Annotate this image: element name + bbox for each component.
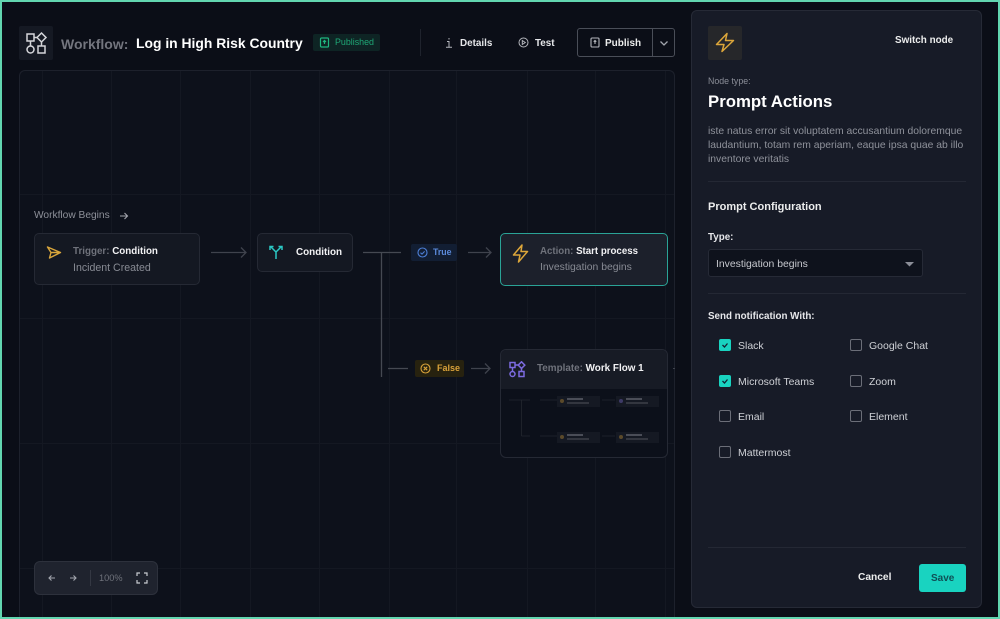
option: google chat: Google Chat bbox=[869, 340, 928, 352]
option: google chat bbox=[850, 339, 928, 352]
panel: zoom controls bbox=[34, 561, 158, 595]
divider bbox=[420, 29, 421, 56]
option: element bbox=[850, 410, 908, 423]
button: save: Save bbox=[931, 573, 954, 584]
badge: false bbox=[415, 360, 464, 377]
condition text: Condition bbox=[296, 247, 342, 258]
option: zoom bbox=[850, 375, 896, 388]
button: test: Test bbox=[535, 38, 555, 48]
label: send notification: Send notification With: bbox=[708, 311, 815, 322]
action text: Action: Start process bbox=[540, 246, 638, 256]
label: workflow begins: Workflow Begins bbox=[34, 210, 110, 221]
badge: true: True bbox=[433, 247, 452, 257]
label: type: Type: bbox=[708, 232, 733, 243]
badge: published: Published bbox=[335, 37, 374, 47]
template preview bbox=[509, 396, 659, 443]
connector stub bbox=[673, 368, 675, 369]
panel: workflow canvas bbox=[19, 70, 675, 617]
node: action bbox=[500, 233, 668, 286]
option: mattermost: Mattermost bbox=[738, 447, 791, 459]
icon: send bbox=[46, 246, 62, 259]
zoom level: 100% bbox=[99, 572, 122, 582]
heading: prompt configuration: Prompt Configuration bbox=[708, 200, 822, 212]
button: publish: Publish bbox=[605, 38, 641, 48]
icon: forward bbox=[70, 575, 77, 581]
panel: node settings bbox=[691, 10, 982, 608]
title: Log in High Risk Country bbox=[136, 34, 303, 50]
button: save bbox=[919, 564, 966, 592]
select: type: Investigation begins bbox=[716, 258, 808, 270]
select: type bbox=[708, 249, 923, 277]
icon: node lightning bbox=[708, 26, 742, 60]
icon: split bbox=[269, 246, 283, 259]
description: laudantium, totam rem aperiam, eaque ipsa quae ab illo bbox=[708, 140, 963, 150]
action sub text: Investigation begins bbox=[540, 262, 632, 272]
icon: back bbox=[48, 575, 55, 581]
icon: template bbox=[509, 361, 526, 378]
button: details bbox=[446, 38, 492, 48]
node: condition bbox=[257, 233, 353, 272]
arrow: false to template bbox=[471, 363, 491, 374]
button: cancel: Cancel bbox=[858, 572, 891, 583]
option: email: Email bbox=[738, 411, 764, 423]
template text: Template: Work Flow 1 bbox=[537, 363, 644, 374]
option: email bbox=[719, 410, 764, 423]
title bbox=[61, 34, 303, 52]
connector: branch bbox=[363, 252, 408, 377]
description: inventore veritatis bbox=[708, 154, 789, 164]
link: switch node: Switch node bbox=[895, 34, 953, 46]
badge: false: False bbox=[437, 363, 460, 373]
trigger sub text: Incident Created bbox=[73, 262, 151, 274]
arrow: trigger to condition bbox=[211, 247, 247, 258]
arrow: true to action bbox=[468, 247, 492, 258]
button: details: Details bbox=[460, 38, 492, 48]
node: trigger bbox=[34, 233, 200, 285]
option: mattermost bbox=[719, 446, 791, 459]
button: publish bbox=[577, 28, 675, 57]
option: microsoft teams: Microsoft Teams bbox=[738, 376, 814, 388]
canvas grid bbox=[20, 71, 674, 617]
option: element: Element bbox=[869, 411, 908, 423]
icon: lightning bbox=[512, 244, 528, 263]
description: iste natus error sit voluptatem accusantium doloremque bbox=[708, 126, 962, 136]
option: slack: Slack bbox=[738, 340, 764, 352]
node: template bbox=[500, 349, 668, 458]
option: slack bbox=[719, 339, 764, 352]
badge: true bbox=[411, 244, 457, 261]
badge: published bbox=[313, 34, 380, 51]
template header bbox=[501, 350, 667, 389]
button: test bbox=[518, 38, 555, 48]
node type label: Node type: bbox=[708, 76, 751, 86]
trigger text: Trigger: Condition bbox=[73, 246, 158, 256]
heading: prompt actions: Prompt Actions bbox=[708, 92, 832, 110]
icon: workflow bbox=[19, 26, 53, 60]
option: zoom: Zoom bbox=[869, 376, 896, 388]
description bbox=[708, 126, 963, 164]
title: Workflow: bbox=[61, 36, 128, 52]
icon: fullscreen bbox=[136, 572, 148, 584]
